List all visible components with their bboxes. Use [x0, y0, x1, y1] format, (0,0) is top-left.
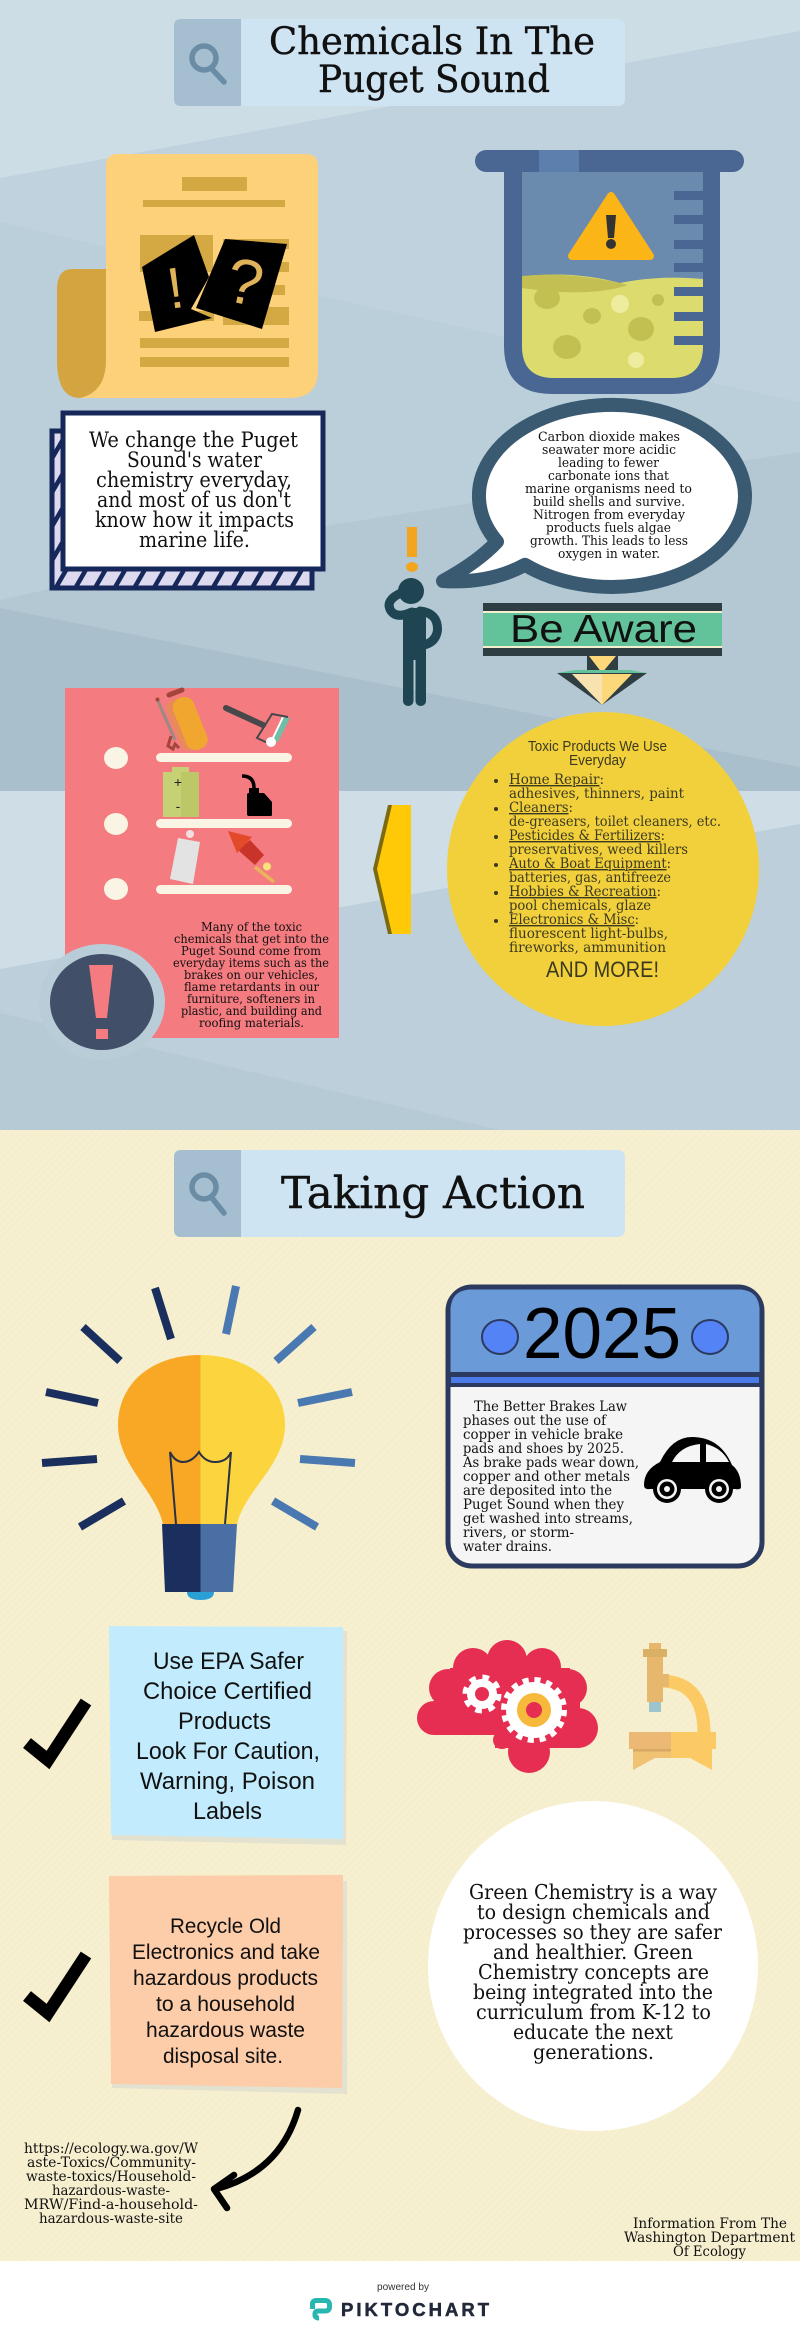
text: Better Brakes Law: As brake pads wear down, — [462, 1455, 639, 1471]
sticky note: EPA safer choice — [109, 1626, 347, 1845]
icon: light bulb with rays — [42, 1286, 355, 1600]
icon: beaker with warning sign — [475, 150, 744, 394]
sticky note: EPA safer choice: Use EPA Safer — [153, 1648, 304, 1675]
text: hazardous waste site link: MRW/Find-a-household- — [24, 2197, 198, 2213]
panel: green chemistry circle: Chemistry concepts are — [478, 1960, 709, 1984]
panel: yellow circle toxic products list: Toxic Products We Use — [528, 738, 667, 755]
sticky note: EPA safer choice: Labels — [193, 1798, 262, 1825]
panel: yellow circle toxic products list: fireworks, ammunition — [509, 940, 666, 956]
panel: yellow circle toxic products list: AND MORE! — [546, 957, 659, 982]
text: many of the toxic chemicals — [173, 920, 329, 1030]
text: Better Brakes Law: The Better Brakes Law — [474, 1399, 627, 1415]
text: hazardous waste site link: waste-toxics/Household- — [26, 2169, 196, 2185]
sticky note: recycle electronics: Electronics and take — [132, 1941, 320, 1964]
panel: yellow circle toxic products list: adhesives, thinners, paint — [509, 786, 684, 802]
sticky note: EPA safer choice: Look For Caution, — [136, 1738, 320, 1765]
panel: yellow circle toxic products list: Everyday — [569, 752, 626, 769]
background: upper blue section — [0, 0, 800, 1130]
panel: yellow circle toxic products list: de-greasers, toilet cleaners, etc. — [509, 814, 721, 830]
text: source credit: Washington Department — [624, 2230, 796, 2246]
text: many of the toxic chemicals: roofing materials. — [199, 1016, 304, 1030]
icon: paint roller — [226, 708, 290, 747]
icon: car — [644, 1437, 741, 1503]
speech bubble: carbon dioxide text: Nitrogen from everyday — [533, 508, 686, 523]
text box: We change the Puget Sound: marine life. — [139, 528, 250, 552]
icon: newspaper with question cards — [57, 154, 318, 398]
text: Better Brakes Law: water drains. — [463, 1539, 552, 1555]
footer logo: powered by Piktochart — [312, 2282, 490, 2320]
speech bubble: carbon dioxide text: Carbon dioxide makes — [538, 430, 680, 445]
icon: newspaper with question cards: ? — [220, 243, 270, 321]
sticky note: recycle electronics: to a household — [156, 1993, 295, 2016]
icon: pressure washer — [156, 690, 211, 753]
panel: green chemistry circle: and healthier. Green — [493, 1940, 693, 1964]
sticky note: EPA safer choice: Products — [178, 1708, 271, 1735]
text: many of the toxic chemicals: flame retardants in our — [184, 980, 319, 994]
panel: green chemistry circle: generations. — [533, 2040, 654, 2064]
icon: firework rocket — [228, 831, 274, 882]
speech bubble: carbon dioxide text — [443, 405, 745, 587]
text: source credit — [624, 2216, 796, 2260]
text: many of the toxic chemicals: Many of the toxic — [201, 920, 302, 934]
text: hazardous waste site link: hazardous-waste- — [52, 2183, 170, 2199]
speech bubble: carbon dioxide text: oxygen in water. — [558, 547, 660, 562]
banner: Be Aware — [483, 603, 722, 656]
text: Better Brakes Law: are deposited into the — [463, 1483, 612, 1499]
text: Better Brakes Law — [462, 1399, 639, 1555]
text: Better Brakes Law: phases out the use of — [463, 1413, 608, 1429]
panel: green chemistry circle: to design chemicals and — [477, 1900, 710, 1924]
panel: yellow circle toxic products list — [447, 712, 759, 1026]
icon: check mark one — [27, 1702, 86, 1760]
text: many of the toxic chemicals: everyday items such as the — [173, 956, 329, 970]
arrow: yellow pointer left — [373, 805, 411, 934]
title bar: Chemicals In The Puget Sound — [174, 19, 625, 106]
text: hazardous waste site link — [24, 2141, 198, 2227]
arrow: curved arrow to link — [214, 2110, 298, 2208]
speech bubble: carbon dioxide text: marine organisms need to — [525, 482, 692, 497]
text box: We change the Puget Sound — [52, 413, 323, 588]
icon: check mark two — [27, 1955, 86, 2013]
panel: yellow circle toxic products list: Electronics & Misc: — [509, 912, 639, 928]
sticky note: recycle electronics: hazardous products — [133, 1967, 318, 1990]
text: many of the toxic chemicals: chemicals that get into the — [174, 932, 329, 946]
speech bubble: carbon dioxide text: products fuels algae — [546, 521, 671, 536]
panel: green chemistry circle: being integrated into the — [473, 1980, 713, 2004]
arrow: banner pointing down — [557, 656, 647, 705]
panel: green chemistry circle: Green Chemistry is a way — [469, 1880, 717, 1904]
text: many of the toxic chemicals: furniture, softeners in — [187, 992, 315, 1006]
footer logo: powered by Piktochart: PIKTOCHART — [341, 2299, 490, 2320]
panel: green chemistry circle — [428, 1801, 758, 2131]
text box: We change the Puget Sound: We change the Puget — [89, 428, 299, 452]
panel: green chemistry circle: curriculum from K-12 to — [476, 2000, 711, 2024]
text: many of the toxic chemicals: brakes on our vehicles, — [184, 968, 318, 982]
icon: warning badge — [39, 944, 165, 1060]
text: hazardous waste site link: https://ecology.wa.gov/W — [24, 2141, 198, 2157]
text box: We change the Puget Sound: Sound's water — [127, 448, 263, 472]
panel: yellow circle toxic products list: fluorescent light-bulbs, — [509, 926, 668, 942]
text: hazardous waste site link: aste-Toxics/Community- — [27, 2155, 196, 2171]
sticky note: EPA safer choice: Choice Certified — [143, 1678, 312, 1705]
text: Better Brakes Law: pads and shoes by 2025. — [463, 1441, 624, 1457]
background: cream section — [0, 1130, 800, 2261]
text: many of the toxic chemicals: plastic, and building and — [181, 1004, 322, 1018]
speech bubble: carbon dioxide text: growth. This leads to less — [530, 534, 688, 549]
sticky note: EPA safer choice: Warning, Poison — [140, 1768, 315, 1795]
icon: microscope — [629, 1643, 716, 1770]
text: Better Brakes Law: Puget Sound when they — [463, 1497, 624, 1513]
footer background — [0, 2261, 800, 2342]
text box: We change the Puget Sound: know how it impacts — [95, 508, 294, 532]
title bar: Chemicals In The Puget Sound: Puget Sound — [318, 58, 550, 101]
title bar: Taking Action — [174, 1150, 625, 1237]
speech bubble: carbon dioxide text: carbonate ions that — [548, 469, 670, 484]
panel: yellow circle toxic products list: batteries, gas, antifreeze — [509, 870, 671, 886]
panel: yellow circle toxic products list: Hobbies & Recreation: — [509, 884, 661, 900]
speech bubble: carbon dioxide text: build shells and survive. — [533, 495, 685, 510]
panel: yellow circle toxic products list: Auto & Boat Equipment: — [508, 856, 671, 872]
title bar: Taking Action: Taking Action — [281, 1168, 585, 1219]
icon: thinking person with exclamation mark — [389, 527, 438, 706]
icon: battery — [163, 767, 199, 817]
panel: green chemistry circle: educate the next — [513, 2020, 674, 2044]
shelves — [104, 747, 292, 900]
speech bubble: carbon dioxide text: leading to fewer — [558, 456, 660, 471]
panel: green chemistry circle: processes so they are safer — [463, 1920, 722, 1944]
sticky note: recycle electronics: disposal site. — [163, 2045, 283, 2068]
title bar: Chemicals In The Puget Sound: Chemicals In The — [269, 20, 595, 63]
text: Better Brakes Law: rivers, or storm- — [463, 1525, 574, 1541]
icon: oil bottle — [242, 776, 272, 816]
panel: yellow circle toxic products list: Pesticides & Fertilizers: — [509, 828, 665, 844]
panel: yellow circle toxic products list: pool chemicals, glaze — [509, 898, 651, 914]
sticky note: recycle electronics: Recycle Old — [170, 1915, 281, 1938]
footer logo: powered by Piktochart: powered by — [377, 2282, 429, 2293]
text: many of the toxic chemicals: Puget Sound come from — [181, 944, 322, 958]
panel: yellow circle toxic products list: preservatives, weed killers — [509, 842, 688, 858]
icon: brain with gears — [417, 1640, 598, 1773]
panel: yellow circle toxic products list: Cleaners: — [509, 800, 573, 816]
panel: yellow circle toxic products list: Home Repair: — [509, 772, 604, 788]
text: source credit: Of Ecology — [673, 2244, 746, 2260]
icon: spray can — [170, 830, 200, 884]
text: Better Brakes Law: copper in vehicle brake — [463, 1427, 623, 1443]
text box: We change the Puget Sound: chemistry everyday, — [96, 468, 292, 492]
text: source credit: Information From The — [633, 2216, 787, 2232]
panel: 2025 license plate, Better Brakes Law — [448, 1287, 762, 1566]
icon: battery: + — [174, 774, 182, 790]
icon: battery: - — [176, 798, 181, 814]
text: Better Brakes Law: copper and other metals — [463, 1469, 630, 1485]
speech bubble: carbon dioxide text: seawater more acidic — [542, 443, 676, 458]
sticky note: recycle electronics — [109, 1875, 347, 2094]
icon: newspaper with question cards: ! — [163, 255, 188, 322]
text: Better Brakes Law: get washed into streams, — [463, 1511, 633, 1527]
panel: 2025 license plate, Better Brakes Law: 2025 — [523, 1294, 681, 1374]
panel: red shelf of toxic products — [65, 688, 339, 1038]
text box: We change the Puget Sound: and most of us don't — [97, 488, 291, 512]
sticky note: recycle electronics: hazardous waste — [146, 2019, 305, 2042]
text: hazardous waste site link: hazardous-waste-site — [39, 2211, 183, 2227]
banner: Be Aware: Be Aware — [510, 608, 697, 651]
